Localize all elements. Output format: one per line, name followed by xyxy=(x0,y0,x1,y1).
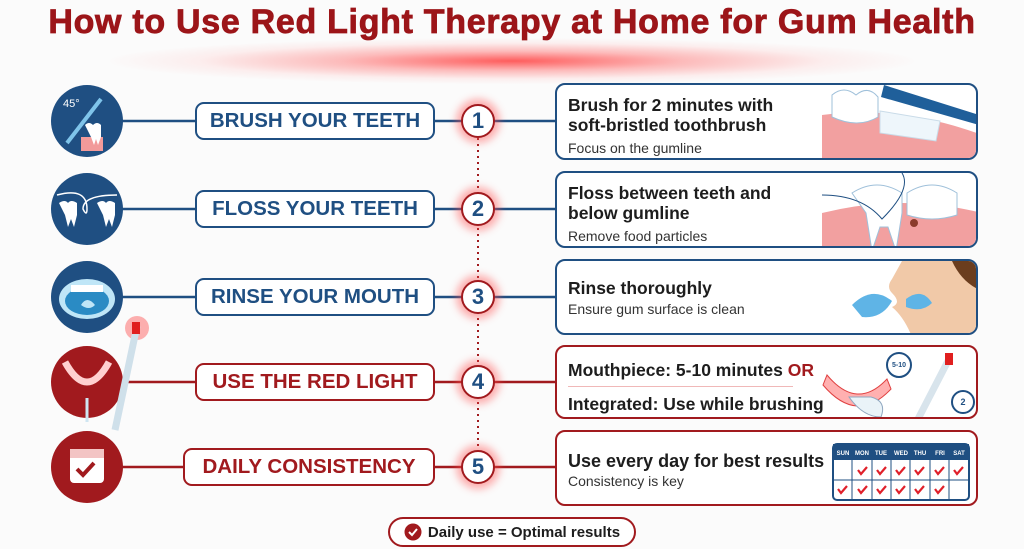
number 3: 3 xyxy=(472,284,484,309)
pill: floss xyxy=(195,190,435,228)
icon: red light xyxy=(51,316,149,431)
panel 3: Rinse thoroughly xyxy=(568,278,712,298)
pill: rinse xyxy=(195,278,435,316)
panel 2: Floss between teeth and xyxy=(568,183,771,203)
number 5: 5 xyxy=(472,454,484,479)
icon: brush: 45° xyxy=(63,98,80,110)
icon: brush xyxy=(51,85,123,157)
number 4 xyxy=(461,365,495,399)
number 5 xyxy=(461,450,495,484)
icon: rinse xyxy=(51,261,123,333)
pill: red light xyxy=(195,363,435,401)
panel 4: 2 xyxy=(960,397,966,407)
panel 2: Remove food particles xyxy=(568,228,707,244)
number 2: 2 xyxy=(472,196,484,221)
panel 1: Focus on the gumline xyxy=(568,140,702,156)
panel 5: WED xyxy=(894,451,909,457)
panel 4: Mouthpiece: 5-10 minutes OR xyxy=(568,360,814,380)
title glow xyxy=(110,38,914,84)
panel 4: 5-10 xyxy=(892,362,906,369)
pill: daily: DAILY CONSISTENCY xyxy=(202,455,416,478)
title: How to Use Red Light Therapy at Home for Gum Health xyxy=(48,3,976,41)
panel 2: below gumline xyxy=(568,203,690,223)
panel 5: FRI xyxy=(935,451,945,457)
number 1 xyxy=(461,104,495,138)
icon: calendar xyxy=(51,431,123,503)
panel 5: Use every day for best results xyxy=(568,451,824,471)
footer badge xyxy=(388,517,636,547)
pill: red light: USE THE RED LIGHT xyxy=(212,370,418,393)
panel 1: Brush for 2 minutes with xyxy=(568,95,773,115)
pill: brush: BRUSH YOUR TEETH xyxy=(210,109,420,132)
number 1: 1 xyxy=(472,108,484,133)
pill: brush xyxy=(195,102,435,140)
number 2 xyxy=(461,192,495,226)
panel 5 xyxy=(555,430,978,506)
panel 4 xyxy=(555,345,978,419)
panel 3: Ensure gum surface is clean xyxy=(568,301,745,317)
panel 5: MON xyxy=(855,451,869,457)
panel 5: SUN xyxy=(837,451,849,457)
panel 3 xyxy=(555,259,978,335)
panel 5: SAT xyxy=(953,451,965,457)
panel 1 xyxy=(555,83,978,160)
panel 1: soft-bristled toothbrush xyxy=(568,115,766,135)
panel 4: Integrated: Use while brushing xyxy=(568,394,824,414)
pill: rinse: RINSE YOUR MOUTH xyxy=(211,285,419,308)
pill: daily xyxy=(183,448,435,486)
panel 5: THU xyxy=(914,451,926,457)
number 3 xyxy=(461,280,495,314)
panel 5: TUE xyxy=(875,451,887,457)
pill: floss: FLOSS YOUR TEETH xyxy=(212,197,418,220)
panel 5: Consistency is key xyxy=(568,473,684,489)
number 4: 4 xyxy=(472,369,484,394)
icon: floss xyxy=(51,173,123,245)
icon: check badge xyxy=(404,524,422,540)
footer badge: Daily use = Optimal results xyxy=(428,524,620,540)
panel 2 xyxy=(555,171,978,248)
